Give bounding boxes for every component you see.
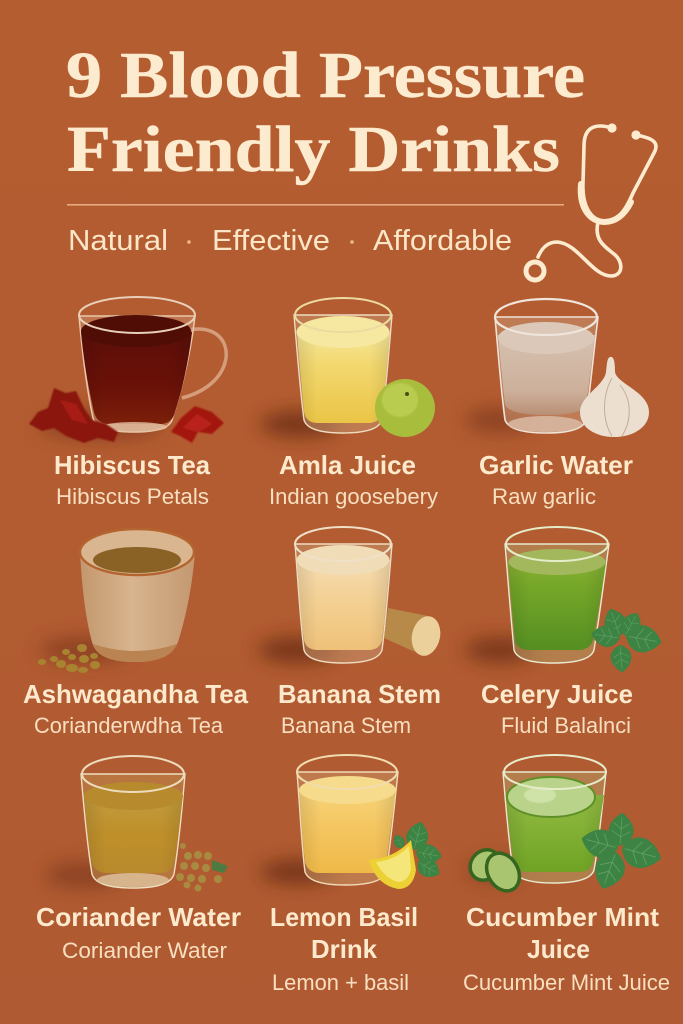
text: row 2 labels: Fluid Balalnci: [501, 713, 631, 738]
ceramic cup: [80, 552, 195, 662]
rim: [79, 297, 195, 333]
title: [66, 39, 585, 186]
panel: cucumber mint juice: [464, 755, 665, 897]
glass: [297, 772, 398, 885]
subtitle: Affordable: [373, 225, 512, 257]
mint leaves: [590, 605, 664, 673]
text: row 1 labels: Indian goosebery: [269, 484, 438, 509]
panel: hibiscus tea: [29, 297, 226, 443]
rim: [504, 755, 606, 789]
text: row 3 labels: Coriander Water: [62, 938, 227, 963]
text: row 3 labels: [36, 902, 670, 995]
panel: lemon basil drink: [260, 755, 444, 889]
glass: [295, 544, 392, 663]
rim: [297, 755, 397, 789]
text: row 1 labels: Garlic Water: [479, 450, 633, 480]
mug handle: [182, 329, 226, 398]
panel: garlic water: [465, 299, 649, 437]
text: row 3 labels: Cucumber Mint Juice: [463, 970, 670, 995]
glass: [505, 544, 609, 663]
panel: amla juice: [260, 298, 435, 437]
text: row 3 labels: Coriander Water: [36, 902, 241, 932]
text: row 3 labels: Juice: [527, 934, 590, 964]
text: row 2 labels: [23, 679, 633, 738]
glass mug: [79, 316, 195, 432]
text: row 3 labels: Cucumber Mint: [466, 902, 659, 932]
text: row 1 labels: Hibiscus Tea: [54, 450, 211, 480]
subtitle: Natural: [68, 225, 168, 257]
text: row 3 labels: Drink: [311, 934, 378, 964]
glass: [495, 317, 598, 433]
panel: celery juice: [465, 527, 664, 673]
basil leaves: [391, 819, 444, 882]
hibiscus petals: [29, 388, 224, 443]
lemon wedge: [369, 840, 416, 889]
text: row 1 labels: [54, 450, 633, 509]
glass: [503, 772, 606, 883]
rim: [495, 299, 597, 335]
glass: [294, 315, 392, 433]
text: row 2 labels: Celery Juice: [481, 679, 633, 709]
text: row 3 labels: Lemon Basil: [270, 902, 418, 932]
coriander seeds: [176, 843, 228, 892]
text: row 1 labels: Hibiscus Petals: [56, 484, 209, 509]
panel: banana stem: [258, 527, 444, 663]
amla fruit: [375, 379, 435, 437]
rim: [295, 298, 391, 332]
text: row 1 labels: Amla Juice: [279, 450, 416, 480]
title: Friendly Drinks: [67, 113, 560, 186]
garlic bulb: [580, 357, 649, 437]
panel: ashwagandha tea: [38, 529, 195, 673]
text: row 2 labels: Corianderwdha Tea: [34, 713, 224, 738]
text: row 3 labels: Lemon + basil: [272, 970, 409, 995]
cucumber slice in glass: [507, 777, 595, 817]
mint sprig: [578, 812, 665, 894]
subtitle: [68, 225, 512, 257]
rim: [295, 527, 391, 561]
rim: [82, 756, 184, 792]
icon: stethoscope: [526, 123, 656, 280]
title: 9 Blood Pressure: [66, 39, 585, 112]
panel: coriander water: [45, 756, 228, 892]
text: row 2 labels: Ashwagandha Tea: [23, 679, 249, 709]
rim: [506, 527, 608, 561]
banana stem slice: [384, 608, 428, 656]
text: row 1 labels: Raw garlic: [492, 484, 596, 509]
text: row 2 labels: Banana Stem: [278, 679, 441, 709]
subtitle: Effective: [212, 225, 330, 257]
text: row 2 labels: Banana Stem: [281, 713, 411, 738]
cucumber slices: [464, 844, 526, 897]
glass: [81, 774, 185, 888]
ashwagandha seeds: [38, 644, 100, 673]
